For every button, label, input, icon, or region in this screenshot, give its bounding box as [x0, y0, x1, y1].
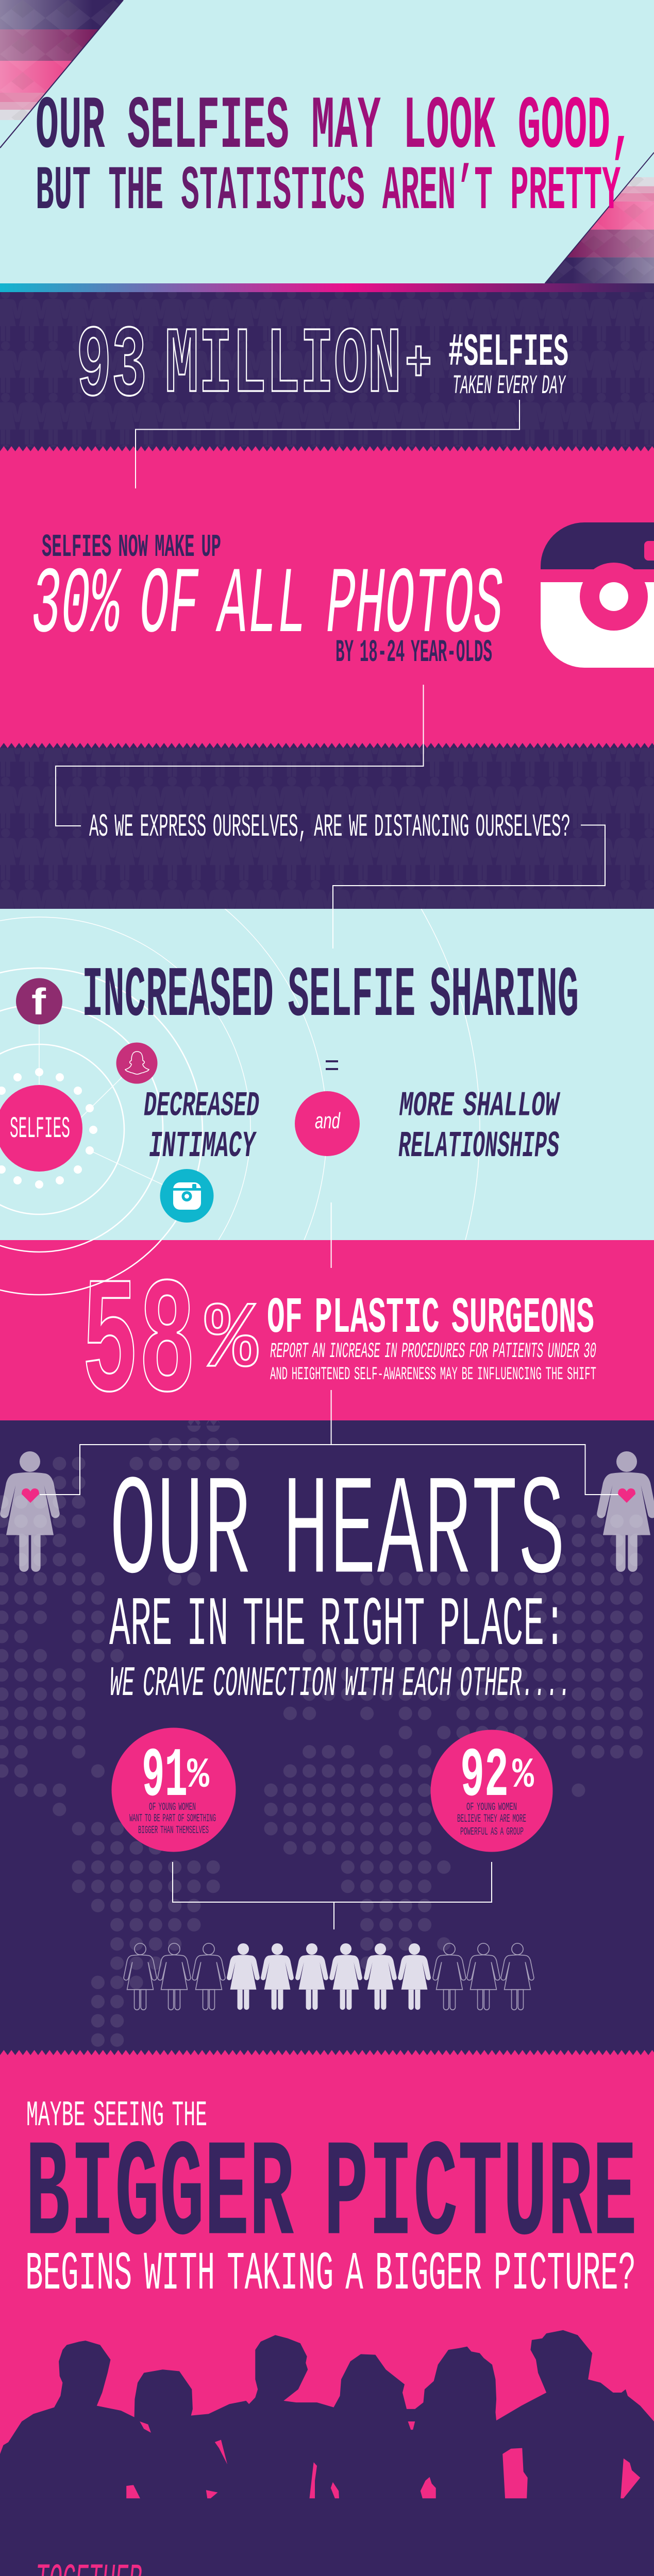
icon: facebook: [16, 978, 62, 1024]
stat circle 92 percent: [431, 1730, 552, 1852]
text: decreased intimacy: [144, 1086, 259, 1167]
stat circle 92 percent: OF YOUNG WOMEN: [466, 1802, 517, 1814]
connector to women: [40, 1390, 618, 1495]
icon: snapchat: [116, 1043, 158, 1084]
stat: 58 percent: [81, 1253, 596, 1440]
stat circle 91 percent: WANT TO BE PART OF SOMETHING: [129, 1813, 216, 1825]
world map dots: [0, 1415, 646, 2049]
heading: bigger picture: MAYBE SEEING THE: [26, 2096, 207, 2137]
text: decreased intimacy: INTIMACY: [149, 1126, 257, 1167]
decorative triangle top right: [545, 150, 654, 283]
stat number outline: 93: [76, 311, 147, 426]
stat number outline: +: [405, 333, 432, 397]
purple zigzag edge: [0, 743, 654, 748]
stat circle 91 percent: %: [187, 1751, 209, 1800]
icon: facebook: f: [31, 981, 46, 1023]
text: decreased intimacy: DECREASED: [144, 1086, 259, 1126]
connector line three: [333, 825, 605, 948]
equals sign: [326, 1060, 338, 1070]
text: more shallow relationships: [398, 1086, 560, 1167]
woman right with heart: [597, 1451, 654, 1572]
text: more shallow relationships: MORE SHALLOW: [399, 1086, 560, 1126]
stat: 30 percent: [31, 529, 503, 671]
connector line one: [136, 400, 519, 488]
bracket connector: [173, 1862, 492, 1929]
stat: 93 million selfies: [76, 311, 568, 426]
connector line two: [56, 685, 424, 826]
stat circle 92 percent: POWERFUL AS A GROUP: [460, 1826, 524, 1838]
icon: instagram: [160, 1169, 213, 1223]
selfies hub: SELFIES: [10, 1113, 70, 1146]
decorative triangle top left: [0, 0, 124, 151]
pink zigzag edge: [0, 446, 654, 451]
stat circle 92 percent: BELIEVE THEY ARE MORE: [457, 1812, 526, 1825]
lead-in: SELFIES NOW MAKE UP: [42, 529, 221, 566]
hub circle: [0, 1085, 82, 1172]
big number outline: 58: [81, 1253, 196, 1440]
stat number outline: MILLION: [165, 313, 401, 419]
inner concentric rings: [0, 968, 203, 1295]
stat circle 91 percent: [111, 1728, 236, 1852]
connector line four: [331, 1202, 332, 1268]
stat circle 91 percent: OF YOUNG WOMEN: [149, 1802, 196, 1814]
concentric rings clipped to section: [0, 909, 480, 1240]
heading: our hearts: [109, 1453, 571, 1708]
pink band for plastic surgeons: [0, 1240, 654, 1420]
and circle: and: [315, 1108, 341, 1133]
selfies hub: [0, 1068, 97, 1189]
stat circle 91 percent: 91: [142, 1737, 188, 1816]
dot ring: [0, 1068, 97, 1189]
pink zigzag edge: [0, 2050, 654, 2055]
and circle: [295, 1091, 360, 1156]
big number outline: %: [205, 1287, 258, 1394]
gradient bar one: [0, 283, 654, 292]
stat circle 92 percent: 92: [460, 1737, 509, 1816]
stat circle 91 percent: BIGGER THAN THEMSELVES: [138, 1825, 209, 1837]
spokes connecting selfies to platforms: [39, 1001, 187, 1196]
row of twelve women: [124, 1943, 534, 2010]
purple zigzag edge: [0, 1420, 654, 1426]
stat number outline: [76, 311, 432, 426]
woman left with heart: [0, 1451, 60, 1572]
icon: instagram camera: [541, 522, 654, 668]
group silhouette: [0, 2330, 654, 2498]
title: [36, 84, 633, 227]
stat circle 92 percent: %: [512, 1751, 534, 1800]
stat: 30 percent: BY 18-24 YEAR-OLDS: [336, 635, 492, 671]
